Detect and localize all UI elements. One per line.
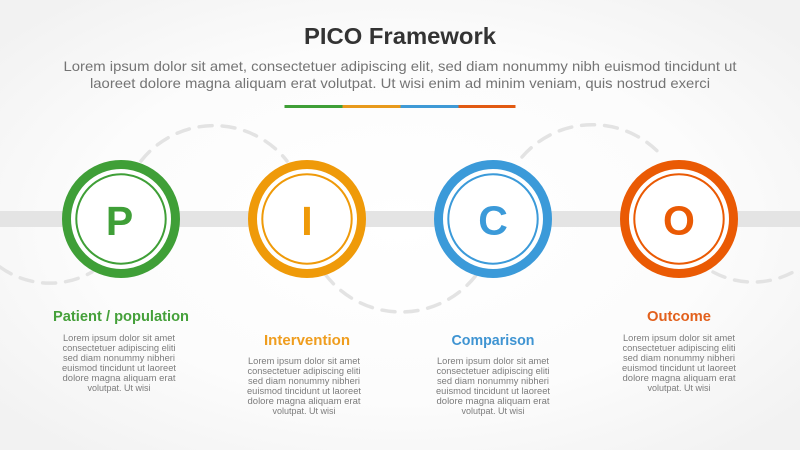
block: Patient / population: consectetuer adipiscing eliti bbox=[62, 343, 176, 353]
block: Intervention: consectetuer adipiscing eliti bbox=[248, 366, 360, 376]
block: Comparison: sed diam nonummy nibheri bbox=[437, 376, 549, 386]
node C bbox=[438, 164, 548, 274]
dashed connector arcs bbox=[0, 125, 800, 312]
title: PICO Framework bbox=[304, 23, 496, 49]
block: Comparison: euismod tincidunt ut laoreet bbox=[436, 386, 551, 396]
block: Intervention: Intervention bbox=[264, 332, 350, 349]
block: Intervention: sed diam nonummy nibheri bbox=[248, 376, 360, 386]
horizontal timeline band bbox=[0, 211, 800, 227]
block: Outcome bbox=[622, 308, 737, 393]
block: Outcome: dolore magna aliquam erat bbox=[622, 373, 736, 383]
subtitle text: Lorem ipsum dolor sit amet, consectetuer adipiscing elit, sed diam nonummy nibh euismod tincidunt ut bbox=[64, 58, 737, 74]
node C: C bbox=[478, 198, 508, 244]
block: Outcome: Outcome bbox=[647, 308, 711, 325]
block: Outcome: euismod tincidunt ut laoreet bbox=[622, 363, 737, 373]
block: Comparison: dolore magna aliquam erat bbox=[436, 396, 550, 406]
block: Outcome: consectetuer adipiscing eliti bbox=[622, 343, 736, 353]
block: Comparison: consectetuer adipiscing eliti bbox=[436, 366, 550, 376]
subtitle text: laoreet dolore magna aliquam erat volutpat. Ut wisi enim ad minim veniam, quis nostrud exerci bbox=[90, 75, 710, 91]
node O: O bbox=[663, 198, 695, 244]
block: Intervention: euismod tincidunt ut laoreet bbox=[247, 386, 362, 396]
block: Comparison: Comparison bbox=[452, 332, 534, 349]
block: Patient / population: volutpat. Ut wisi bbox=[88, 383, 150, 393]
colour divider bar bbox=[284, 105, 516, 108]
block: Intervention bbox=[247, 332, 362, 416]
node P bbox=[66, 164, 176, 274]
block: Comparison: volutpat. Ut wisi bbox=[462, 406, 524, 416]
block: Outcome: Lorem ipsum dolor sit amet bbox=[623, 333, 736, 343]
block: Patient / population bbox=[53, 308, 189, 393]
block: Intervention: dolore magna aliquam erat bbox=[248, 396, 361, 406]
node I bbox=[252, 164, 362, 274]
block: Patient / population: sed diam nonummy nibheri bbox=[63, 353, 175, 363]
block: Patient / population: dolore magna aliquam erat bbox=[62, 373, 176, 383]
subtitle text bbox=[64, 58, 737, 91]
block: Intervention: volutpat. Ut wisi bbox=[272, 406, 336, 416]
block: Patient / population: Lorem ipsum dolor sit amet bbox=[63, 333, 176, 343]
block: Patient / population: Patient / population bbox=[53, 308, 189, 325]
node O bbox=[624, 164, 734, 274]
node I: I bbox=[301, 198, 313, 244]
block: Comparison: Lorem ipsum dolor sit amet bbox=[437, 356, 550, 366]
block: Intervention: Lorem ipsum dolor sit amet bbox=[248, 356, 361, 366]
block: Outcome: sed diam nonummy nibheri bbox=[623, 353, 735, 363]
block: Patient / population: euismod tincidunt ut laoreet bbox=[62, 363, 177, 373]
block: Comparison bbox=[436, 332, 551, 416]
node P: P bbox=[106, 198, 133, 244]
block: Outcome: volutpat. Ut wisi bbox=[648, 383, 710, 393]
